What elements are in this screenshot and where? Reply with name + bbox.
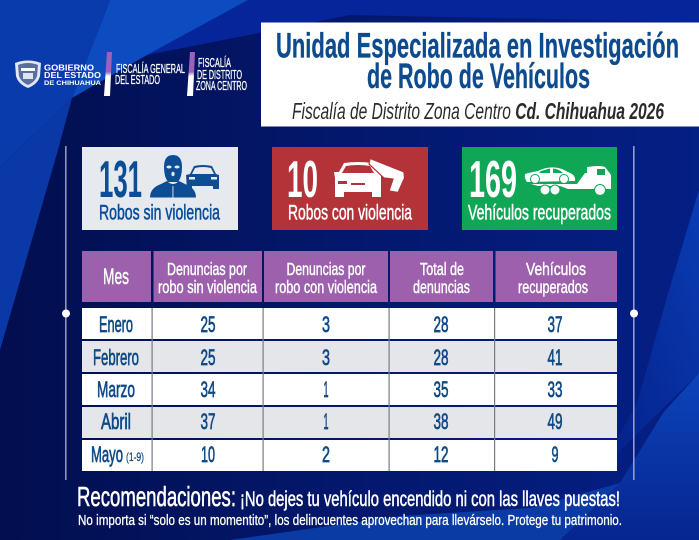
icon: tow truck (525, 166, 611, 196)
row: Mayo: Mayo (91, 442, 123, 467)
row: Febrero: 25 (200, 345, 216, 370)
title panel (261, 22, 699, 126)
row: Febrero: 28 (434, 345, 448, 370)
row: Mayo: (1-9) (126, 450, 144, 464)
panel: robos sin violencia (82, 147, 238, 230)
icon: state shield (15, 60, 41, 88)
icon: car front (334, 162, 381, 197)
row: Mayo (91, 442, 558, 467)
row: Mayo: 9 (552, 442, 558, 467)
row: Enero: 37 (548, 312, 562, 337)
recommendations heading: Recomendaciones: (77, 481, 236, 512)
prosecutor general label: DEL ESTADO (115, 72, 160, 87)
row: Enero: 3 (322, 312, 330, 337)
logo text: DEL ESTADO (44, 70, 101, 80)
district prosecutor label: DE DISTRITO (197, 67, 242, 82)
number 169: 169 (469, 151, 517, 209)
label: Robos con violencia (288, 202, 412, 224)
district prosecutor label: FISCALÍA (198, 55, 231, 70)
table header: Mes (103, 264, 129, 289)
table header: recuperados (518, 277, 588, 297)
row: Marzo: 35 (434, 377, 448, 402)
divider bar 1 (104, 52, 112, 96)
row: Marzo (97, 377, 562, 402)
table header: Total de (420, 259, 464, 279)
side rail right (630, 146, 638, 480)
row: Febrero: 41 (548, 345, 562, 370)
row: Enero: 25 (200, 312, 216, 337)
panel: vehiculos recuperados (462, 147, 617, 230)
table header: Denuncias por (286, 259, 366, 279)
prosecutor general label: FISCALÍA GENERAL (116, 61, 185, 76)
row: Abril: 49 (548, 409, 562, 434)
row: Marzo: Marzo (97, 377, 135, 402)
table header: robo con violencia (275, 277, 377, 297)
row: Febrero: 3 (322, 345, 330, 370)
side rail left (62, 146, 70, 480)
recommendations (77, 481, 622, 529)
row: Marzo: 34 (200, 377, 216, 402)
row: Marzo: 33 (548, 377, 562, 402)
table header: denuncias (413, 277, 470, 297)
row: Marzo: 1 (324, 377, 328, 402)
row: Mayo: 12 (434, 442, 448, 467)
table header: robo sin violencia (158, 277, 257, 297)
label: Vehículos recuperados (468, 202, 611, 224)
row: Abril: 37 (200, 409, 216, 434)
label: Robos sin violencia (99, 202, 220, 224)
table header: Denuncias por (167, 259, 247, 279)
district prosecutor label: ZONA CENTRO (196, 78, 247, 93)
logo text: DE CHIHUAHUA (44, 80, 101, 87)
row: Mayo: 10 (201, 442, 215, 467)
row backgrounds (82, 308, 617, 471)
icon: masked person (150, 155, 196, 198)
logo text (44, 62, 101, 87)
row: Enero (99, 312, 562, 337)
table header (82, 251, 617, 302)
row: Enero: 28 (434, 312, 448, 337)
row: Abril: Abril (101, 409, 131, 434)
logo text: GOBIERNO (44, 62, 94, 72)
icon: car (186, 165, 219, 189)
row: Abril: 1 (324, 409, 328, 434)
row: Mayo: 2 (322, 442, 330, 467)
prosecutor general label (115, 61, 185, 87)
divider bar 2 (187, 52, 195, 96)
government logo (15, 52, 247, 96)
table header: Vehículos (526, 259, 586, 279)
table (82, 251, 617, 471)
row: Febrero (93, 345, 562, 370)
row: Enero: Enero (99, 312, 133, 337)
row: Febrero: Febrero (93, 345, 139, 370)
panel: robos sin violencia: 131 (99, 151, 142, 209)
district prosecutor label (196, 55, 247, 93)
panel: robos con violencia (272, 147, 428, 230)
icon: handgun (369, 158, 404, 192)
row: Abril (101, 409, 562, 434)
number 10: 10 (287, 151, 318, 209)
row: Abril: 38 (434, 409, 448, 434)
title (276, 26, 679, 96)
